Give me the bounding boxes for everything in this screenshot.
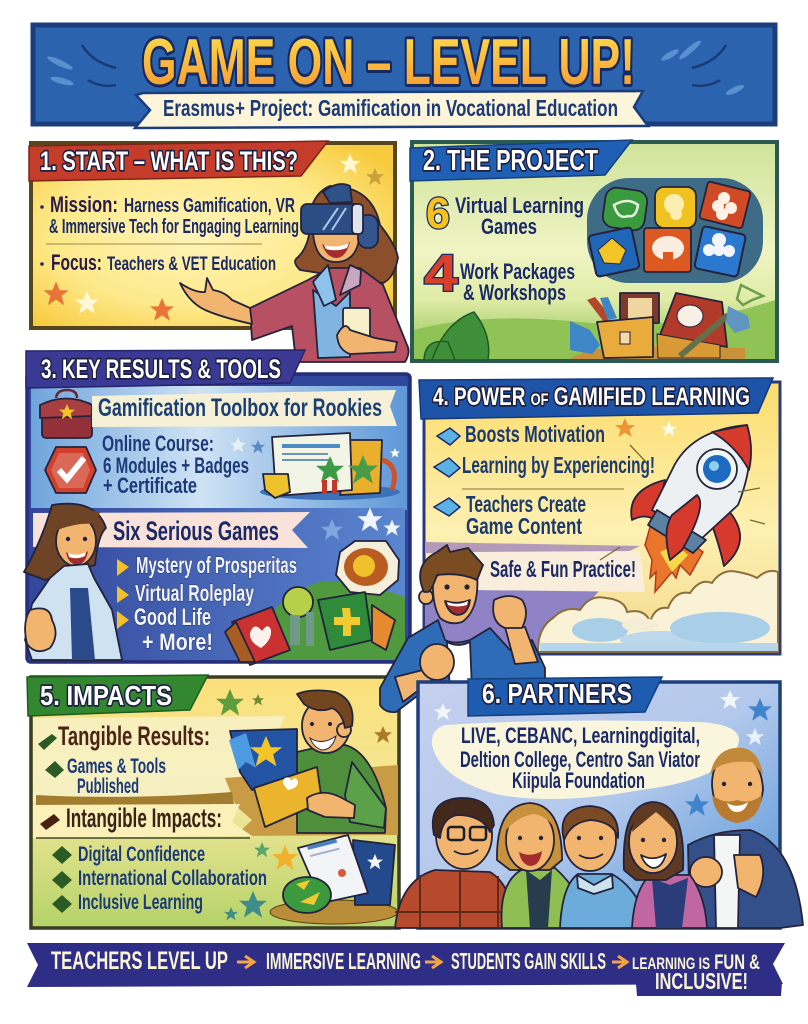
character: teacher with VR headset [180,184,409,362]
intangible impacts text: Intangible Impacts: [66,803,222,833]
partner: man with beard [688,748,803,928]
tab: section 3 heading [26,350,305,388]
footer step: learning is fun and inclusive: INCLUSIVE! [655,968,748,994]
benefit: motivation: Boosts Motivation [465,421,605,447]
benefit: experiencing [434,452,655,478]
panel 3: key results and tools [24,350,410,665]
tab: section 1 heading: 1. START – WHAT IS THIS? [40,146,298,176]
focus text [40,250,276,275]
ground strip [414,300,775,359]
stars [216,689,392,920]
partners speech bubble: Deltion College, Centro San Viator [460,747,700,772]
games list [117,552,297,656]
online course text: Online Course: [102,431,214,456]
panel 2: the project [410,140,777,361]
impact list: Inclusive Learning [78,891,203,914]
impact list: International Collaboration [78,867,267,890]
games illustration [225,541,405,665]
games list: + More! [142,629,213,656]
certificate illustration [260,433,400,500]
footer step: learning is fun and inclusive [632,951,760,994]
tab: section 3 heading: 3. KEY RESULTS & TOOLS [41,354,281,384]
tangible results text: Published [77,775,139,798]
character: cheering student [380,545,545,712]
games list: Mystery of Prosperitas [136,552,297,578]
clouds [538,571,778,652]
tab: section 1 heading [29,141,328,181]
table, documents and globe [270,835,398,924]
partner: woman with dark hair [624,802,707,928]
tab: section 6 heading: 6. PARTNERS [482,678,632,709]
toolbox ribbon [92,390,397,427]
tab: section 4 heading: 4. POWER OF GAMIFIED LEARNING [433,383,750,411]
six serious games ribbon [33,512,310,548]
online course text: 6 Modules + Badges [103,453,249,478]
number 4 with text: Work Packages [460,259,575,284]
leaf plant [424,312,489,360]
mission text [40,192,299,244]
tangible results text: Tangible Results: [58,721,210,751]
character holding book and card [229,690,386,833]
safe and fun band [470,551,645,592]
games list: Virtual Roleplay [135,580,254,606]
benefit: experiencing: Learning by Experiencing! [462,452,655,478]
stars [44,154,384,321]
stars [434,690,772,816]
tab: section 4 heading [419,378,773,419]
character: teacher in lab coat [24,504,122,660]
focus text: Focus: [51,250,102,275]
mission text: Harness Gamification, VR [124,195,295,217]
panel 1: start [29,141,395,328]
intangible impacts text [40,803,222,833]
panel 6: partners [395,677,803,928]
benefit: motivation [437,421,605,447]
footer step: students gain skills: STUDENTS GAIN SKILLS [451,948,606,974]
toolbox icon [40,390,92,438]
number 4 with text: & Workshops [463,280,566,305]
footer step: learning is fun and inclusive: LEARNING IS FUN & [632,951,760,974]
number 6 with text: 6 [426,189,450,238]
safe and fun band: Safe & Fun Practice! [490,556,636,582]
online course text: + Certificate [103,473,197,498]
tab: section 5 heading [27,675,208,716]
footer ribbon [27,943,785,996]
footer step: immersive learning: IMMERSIVE LEARNING [266,948,421,974]
toolbox ribbon: Gamification Toolbox for Rookies [98,394,382,422]
toolbox and supplies [570,285,763,358]
mission text: & Immersive Tech for Engaging Learning [49,216,299,238]
number 4 with text [424,245,575,305]
number 4 with text: 4 [424,245,458,303]
stars and sparkles [615,418,677,437]
partners speech bubble [432,721,739,799]
benefit: teachers create: Game Content [466,513,582,539]
partners speech bubble: LIVE, CEBANC, Learningdigital, [461,723,700,748]
partner: young man [560,806,648,928]
number 6 with text: Virtual Learning [455,193,584,218]
tab: section 5 heading: 5. IMPACTS [40,680,172,711]
partners speech bubble: Kiipula Foundation [512,768,645,793]
arrow [612,956,627,968]
footer step: teachers level up: TEACHERS LEVEL UP [51,947,228,975]
partner: woman with blond hair [497,803,586,928]
online course text [102,431,249,498]
game cards [587,178,763,283]
impact list [52,843,267,914]
benefit: teachers create [434,491,586,539]
badge icon [45,447,96,493]
rocket illustration [600,425,765,592]
panel 5: impacts [27,675,399,928]
subtitle ribbon [135,91,648,128]
games list: Good Life [134,604,211,631]
partner: man with glasses [395,798,516,928]
tangible results text [38,721,210,798]
tab: section 2 heading [410,140,632,181]
header banner [33,25,775,128]
stars [230,437,400,540]
benefit: teachers create: Teachers Create [466,491,586,517]
six serious games ribbon: Six Serious Games [113,516,279,546]
mission text: Mission: [50,192,118,217]
tangible results text: Games & Tools [67,755,166,778]
subtitle ribbon: Erasmus+ Project: Gamification in Vocational Education [163,95,618,121]
panel 4: power of gamified learning [419,378,780,654]
focus text: Teachers & VET Education [107,254,276,275]
arrow [425,956,441,968]
number 6 with text [426,189,584,239]
impact list: Digital Confidence [78,843,205,866]
arrow [237,956,254,968]
tab: section 2 heading: 2. THE PROJECT [423,145,598,177]
number 6 with text: Games [481,214,537,239]
